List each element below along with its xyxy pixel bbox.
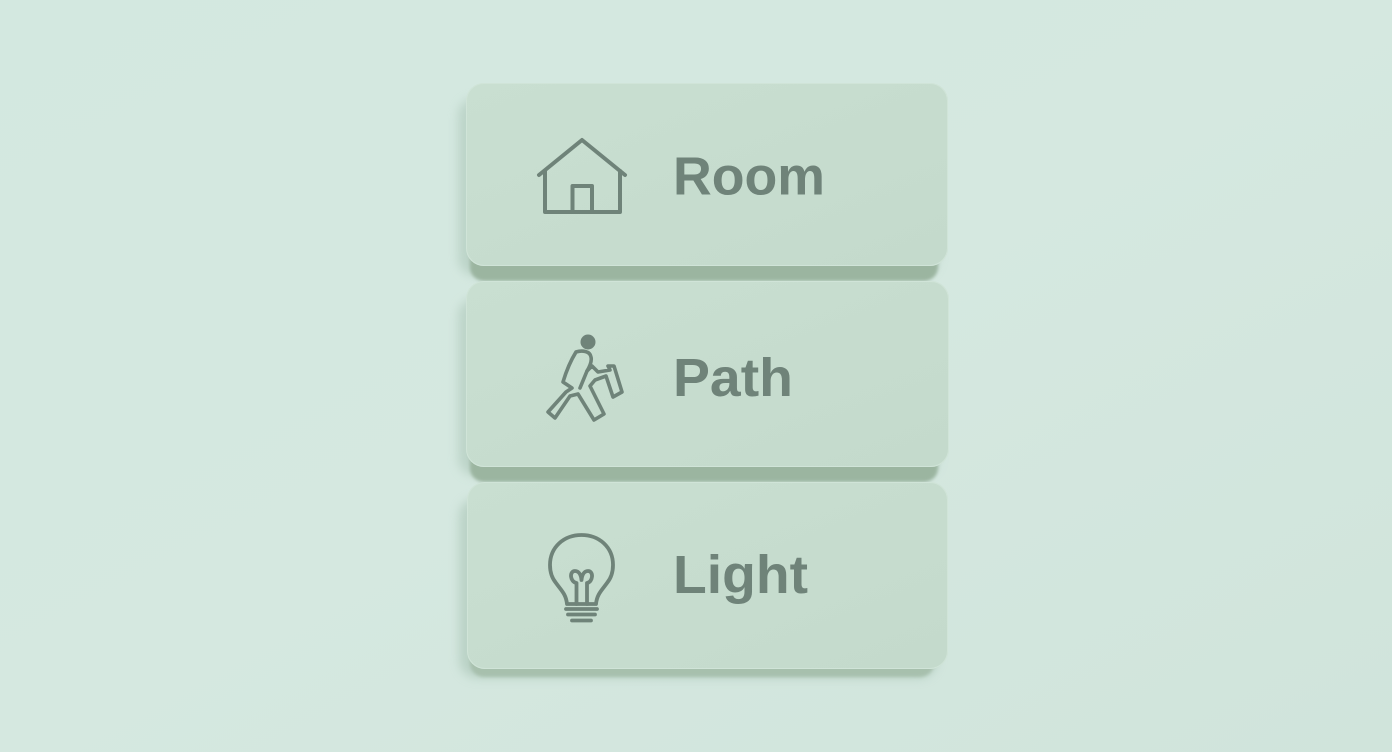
icon: house bbox=[539, 140, 625, 212]
icon: light bulb bbox=[550, 535, 613, 620]
label: Path: Path bbox=[673, 348, 793, 408]
icon: walking figure bbox=[548, 334, 622, 420]
panel: Path button bbox=[458, 281, 949, 482]
panel: Room button bbox=[458, 83, 948, 281]
label: Room: Room bbox=[673, 146, 825, 206]
panel: Light button bbox=[459, 482, 948, 678]
label: Light: Light bbox=[673, 545, 808, 605]
